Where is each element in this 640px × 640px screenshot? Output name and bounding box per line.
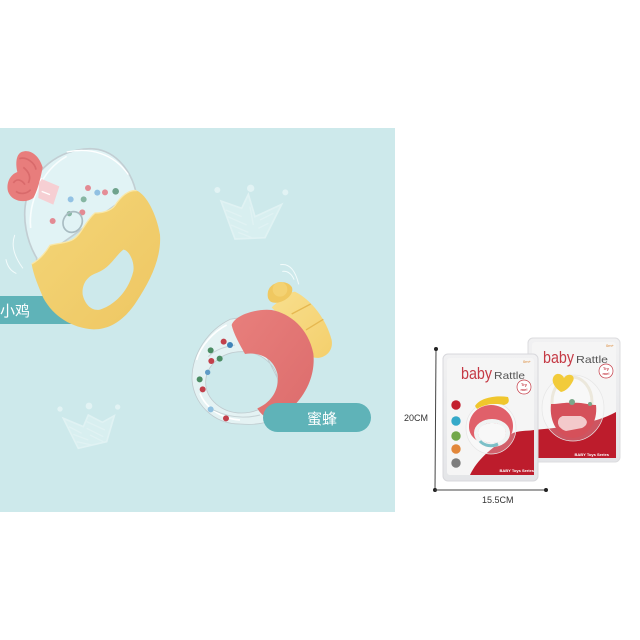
try me badge: me! [520, 387, 528, 392]
package: left card: 0m+ [523, 359, 532, 364]
try me badge: Try [603, 366, 610, 371]
label: height: 20CM [404, 413, 428, 423]
pink inner piece [38, 178, 59, 205]
beads [50, 185, 119, 224]
coral body [232, 310, 314, 422]
package: right card: Rattle [576, 354, 608, 366]
package: right card: BABY Toys Series [574, 452, 610, 457]
icon: crown bottom [57, 403, 120, 448]
icon: crown top [214, 185, 288, 239]
icon: motion lines left [6, 235, 23, 273]
packaged bee rattle [466, 396, 516, 454]
icon: pink heart comb [7, 151, 43, 201]
packaged chick rattle [542, 374, 604, 441]
package: right card: 0m+ [606, 343, 615, 348]
try me badge [599, 364, 613, 378]
try me badge: me! [602, 371, 610, 376]
try me badge: Try [521, 382, 528, 387]
panel: teal product background [0, 128, 395, 512]
label: width: 15.5CM [482, 495, 514, 505]
package: left card: BABY Toys Series [499, 468, 535, 473]
package title: baby [543, 348, 574, 367]
package: left card [443, 354, 538, 481]
clear egg shell [25, 149, 136, 261]
try me badge [517, 380, 531, 394]
yellow wing [268, 282, 332, 358]
label: chick [0, 296, 72, 324]
illustration: chick rattle [6, 149, 160, 329]
label: chick: 小鸡 [0, 303, 30, 320]
illustration: bee rattle [192, 264, 332, 424]
package: right card [528, 338, 620, 462]
inner ring [59, 208, 86, 236]
package title: baby [461, 364, 492, 383]
side feature icons [451, 400, 461, 468]
package: left card: Rattle [494, 370, 525, 382]
beads [197, 339, 233, 421]
icon: motion lines [281, 264, 299, 284]
label: bee: 蜜蜂 [307, 411, 337, 428]
dimension: width line [435, 488, 548, 492]
label: bee [263, 403, 371, 432]
clear ring [192, 317, 280, 424]
dimension: height line [433, 347, 438, 492]
yellow body [32, 191, 160, 329]
